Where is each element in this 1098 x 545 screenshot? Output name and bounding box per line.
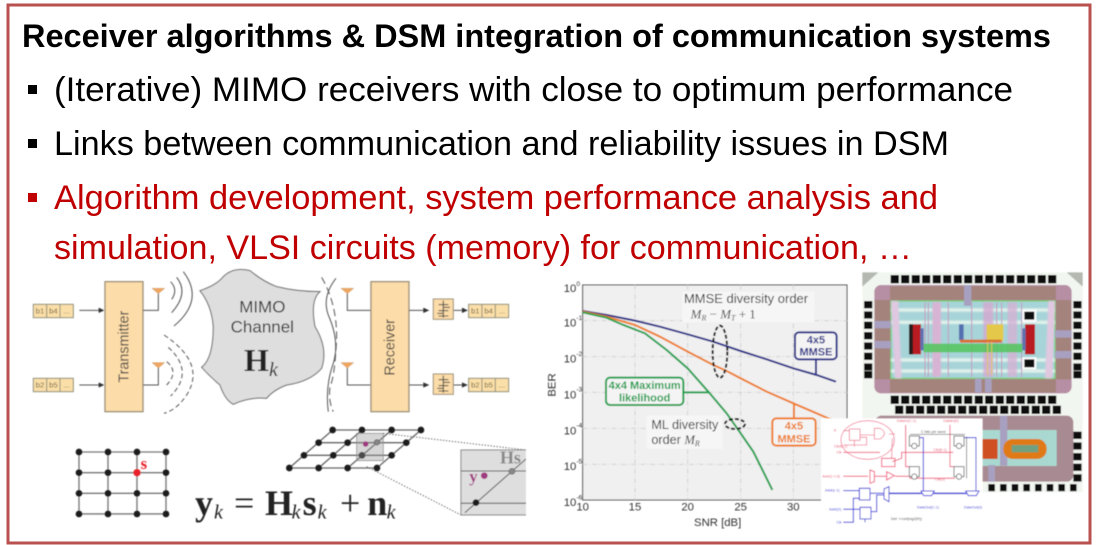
curve: 4x5 MMSE orange	[583, 312, 847, 427]
receive wavefronts	[322, 277, 337, 412]
x axis labels	[576, 502, 800, 514]
schematic labels: Addr(r-1:0)	[822, 475, 840, 479]
dashed ellipse: ML	[725, 419, 745, 429]
dotted zoom lines	[367, 433, 526, 515]
output bits row 2: b2	[471, 381, 480, 390]
label: green maximum likelihood: likelihood	[619, 392, 670, 404]
lower right pads	[988, 432, 1082, 491]
axis title: SNR: SNR [dB]	[694, 517, 741, 529]
equation: k	[318, 501, 328, 523]
y axis labels: 10	[564, 461, 576, 473]
axis title: BER: BER	[547, 373, 559, 397]
black word line	[910, 434, 967, 478]
schematic labels: Addr(0)	[829, 508, 841, 512]
annotation: MMSE diversity order: R	[700, 314, 706, 323]
output arrows	[409, 308, 468, 388]
schematic labels: Clk(B-1)	[834, 445, 847, 449]
label: orange 4x5 MMSE: 4x5	[785, 420, 803, 432]
bullet 1: (Iterative) MIMO receivers with close to optimum performance	[54, 71, 1013, 109]
schematic labels: E	[834, 429, 837, 433]
bond pads sides	[864, 301, 1082, 378]
equation: k	[292, 501, 302, 523]
label: green maximum likelihood	[606, 378, 708, 405]
bullet list	[28, 71, 1013, 267]
annotation: MMSE diversity order: M	[691, 307, 701, 322]
blue blocks	[859, 487, 979, 519]
output bits row 2	[469, 378, 509, 392]
bond pads top	[891, 275, 1056, 283]
annotation: ML diversity order: R	[694, 439, 700, 448]
MIMO channel cloud: k	[269, 359, 279, 381]
label: blue 4x5 MMSE: MMSE	[799, 347, 832, 359]
bullet 3: simulation, VLSI circuits (memory) for communication, …	[54, 229, 912, 267]
transmit antennas	[143, 288, 165, 385]
input bits row 2: ...	[63, 381, 70, 390]
bullet 2: Links between communication and reliability issues in DSM	[54, 125, 949, 163]
equation: k	[387, 501, 397, 523]
MIMO channel cloud	[200, 270, 324, 404]
equation: +	[340, 483, 360, 523]
zoomed inset: Hs	[500, 448, 521, 468]
receive antennas	[341, 288, 371, 385]
x axis labels: 30	[787, 502, 800, 514]
label: blue 4x5 MMSE: 4x5	[807, 334, 825, 346]
equation	[195, 483, 397, 523]
input bits row 1: b4	[49, 307, 58, 316]
gridlines	[583, 285, 847, 500]
dashed radio waves	[164, 335, 193, 413]
upper cut-outs	[1023, 311, 1035, 368]
annotation: ML diversity order: order M	[651, 433, 695, 447]
annotation: MMSE diversity order: M	[720, 307, 731, 322]
input arrows	[79, 308, 104, 388]
label: orange 4x5 MMSE	[772, 403, 816, 446]
annotation: MMSE diversity order: MMSE diversity order	[684, 291, 809, 306]
memory arrays	[909, 324, 1035, 375]
annotation: MMSE diversity order: −	[706, 307, 720, 322]
equation: n	[367, 483, 387, 523]
curve: 4x5 MMSE blue	[583, 311, 836, 382]
x axis labels: 20	[681, 502, 694, 514]
dashed ellipse: MMSE	[713, 326, 727, 378]
curve: 4x4 ML green	[583, 312, 772, 490]
annotation: ML diversity order	[647, 416, 723, 449]
bullet 3: Algorithm development, system performance analysis and	[54, 179, 938, 217]
schematic labels: Def: r=ceil(log2(R))	[891, 517, 922, 521]
lower memory array	[982, 439, 1047, 459]
upper core	[891, 301, 1055, 378]
schematic labels: DataOut(C-1)	[917, 506, 939, 510]
y axis labels: -3	[576, 387, 583, 394]
input bits row 2	[33, 378, 73, 392]
input bits row 1: ...	[63, 307, 70, 316]
y axis labels: -5	[576, 458, 583, 465]
MIMO channel cloud: H	[244, 342, 269, 378]
pink latch detail	[841, 421, 895, 459]
upper core ring	[874, 285, 1072, 393]
y axis labels: -6	[576, 494, 583, 501]
MIMO channel cloud: Channel	[231, 318, 294, 337]
input bits row 2: b2	[36, 381, 44, 390]
die background	[862, 272, 1083, 492]
annotation: MMSE diversity order: + 1	[735, 307, 756, 322]
slicer blocks	[433, 299, 453, 394]
label: orange 4x5 MMSE: MMSE	[777, 433, 810, 445]
equation: s	[303, 483, 317, 523]
schematic labels: DataOut(0)	[964, 506, 982, 510]
zoomed inset: y	[469, 467, 478, 486]
bullet 3	[28, 179, 938, 267]
cross markers	[874, 285, 1072, 392]
MIMO channel cloud: MIMO	[239, 297, 285, 316]
constellation grid: s	[141, 454, 148, 473]
output bits row 1: b1	[471, 307, 480, 316]
receiver block: Receiver	[383, 319, 399, 376]
annotation: MMSE diversity order	[682, 291, 814, 323]
memory cells	[909, 436, 964, 479]
y axis labels: 10	[564, 497, 576, 509]
output bits row 2: ...	[499, 381, 505, 390]
input bits row 2: b5	[49, 381, 58, 390]
schematic labels: Clk	[836, 451, 842, 455]
y axis labels: 10	[564, 318, 576, 330]
y axis labels: 0	[576, 281, 580, 288]
label: blue 4x5 MMSE	[795, 332, 837, 375]
annotation: ML diversity order: ML diversity	[651, 418, 719, 432]
transmitter block	[105, 282, 143, 412]
x axis labels: 15	[629, 502, 641, 514]
x axis labels: 25	[734, 502, 747, 514]
MIMO system diagram	[33, 270, 534, 523]
plot area	[583, 285, 847, 500]
pink storage lines	[843, 425, 955, 483]
chip layout micrograph	[862, 272, 1083, 492]
schematic labels: DataIn(C-1)	[897, 419, 916, 423]
y axis labels: -1	[576, 315, 583, 322]
equation: H	[265, 483, 293, 523]
zoomed inset	[461, 448, 534, 515]
schematic background	[821, 418, 983, 530]
output bits row 1: ...	[499, 307, 505, 316]
solid radio waves	[171, 272, 192, 326]
lower core ring	[875, 416, 1073, 482]
output bits row 1	[469, 304, 509, 318]
memory circuit schematic	[821, 418, 983, 530]
perspective lattice	[286, 427, 424, 471]
schematic labels: Addr(r-1)	[825, 489, 840, 493]
receiver block	[371, 282, 409, 412]
y axis labels: 10	[564, 389, 576, 401]
y axis labels	[564, 281, 583, 509]
y axis labels: -4	[576, 423, 583, 430]
equation: y	[195, 483, 213, 523]
x axis labels: 10	[576, 502, 589, 514]
schematic labels: Clk(0)	[935, 477, 945, 481]
title: Receiver algorithms & DSM integration of communication systems	[22, 18, 1051, 54]
y axis labels: 10	[564, 425, 576, 437]
equation: =	[234, 483, 254, 523]
output bits row 2: b5	[484, 381, 493, 390]
die corners	[862, 272, 1083, 287]
blue output lines	[843, 438, 976, 522]
annotation: MMSE diversity order: T	[731, 314, 736, 323]
schematic labels: Clk	[836, 521, 842, 525]
schematic labels: C bits per word	[921, 430, 946, 434]
schematic labels: Clk(B-1)	[933, 448, 947, 452]
input bits row 1	[33, 304, 73, 318]
constellation grid	[76, 449, 169, 517]
label: green maximum likelihood: 4x4 Maximum	[609, 380, 681, 392]
equation: k	[214, 501, 224, 523]
output bits row 1: b4	[484, 307, 494, 316]
schematic labels	[822, 419, 982, 525]
input bits row 1: b1	[36, 307, 44, 316]
schematic labels: DataIn(0)	[943, 419, 959, 423]
y axis labels: -2	[576, 351, 583, 358]
y axis labels: 10	[564, 283, 576, 295]
bond pads middle	[891, 396, 1061, 414]
BER chart	[547, 281, 847, 529]
y axis labels: 10	[564, 354, 576, 366]
transmitter block: Transmitter	[117, 310, 133, 383]
